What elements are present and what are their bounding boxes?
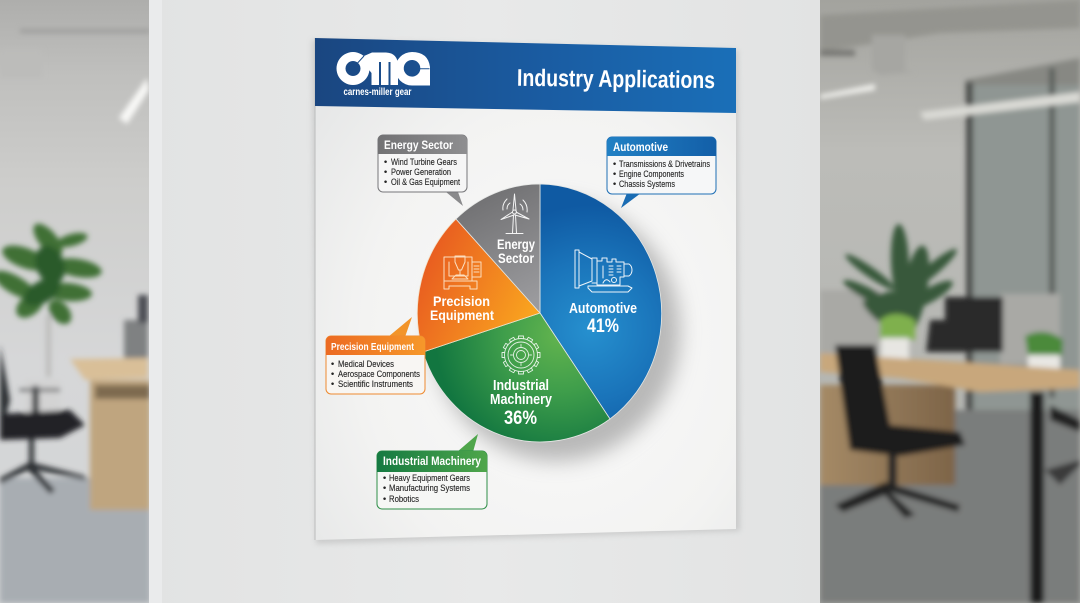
background: office left: [0, 0, 150, 603]
slice: industrial machinery: [423, 313, 610, 442]
label: precision equipment: Equipment: [430, 307, 494, 323]
header band: [315, 38, 736, 113]
pie chart: [417, 184, 662, 442]
callout: precision equipment: Scientific Instruments: [338, 379, 413, 389]
callout: industrial machinery: •: [383, 494, 386, 504]
callout: energy sector: Energy Sector: [384, 138, 453, 152]
callout: energy sector: Oil & Gas Equipment: [391, 177, 460, 187]
background: office right: [820, 0, 1080, 603]
callout: automotive: [607, 137, 716, 208]
callout: automotive: Chassis Systems: [619, 179, 675, 189]
logo: [337, 52, 430, 98]
callout: automotive: •: [613, 159, 616, 169]
callout: energy sector: Power Generation: [391, 167, 451, 177]
callout: precision equipment: •: [331, 369, 334, 379]
poster: [315, 38, 736, 540]
callout: precision equipment: •: [331, 359, 334, 369]
label: energy sector: Sector: [498, 251, 535, 266]
label: automotive: Automotive: [569, 300, 637, 317]
logo text: carnes-miller gear: [344, 87, 412, 98]
callout: automotive: •: [613, 179, 616, 189]
title: Industry Applications: [517, 65, 715, 94]
callout: energy sector: •: [384, 157, 387, 167]
callout: automotive: Transmissions & Drivetrains: [619, 159, 710, 169]
callout: industrial machinery: [377, 434, 487, 509]
callout: precision equipment: Precision Equipment: [331, 341, 414, 353]
icon: wind turbine: [501, 194, 529, 234]
slice: automotive: [540, 184, 662, 419]
slice: energy sector: [456, 184, 540, 313]
callout: precision equipment: •: [331, 379, 334, 389]
label: industrial machinery: [490, 377, 553, 429]
callout: precision equipment: [326, 317, 425, 394]
label: precision equipment: Precision: [433, 293, 490, 309]
pie shadow: [432, 201, 680, 461]
poster shadow: [312, 40, 740, 544]
callout: industrial machinery: •: [383, 473, 386, 483]
callout: energy sector: [378, 135, 467, 206]
label: industrial machinery: 36%: [504, 408, 537, 429]
callout: precision equipment: Aerospace Components: [338, 369, 420, 379]
callout: industrial machinery: Heavy Equipment Gears: [389, 473, 470, 483]
icon: transmission: [575, 250, 632, 292]
label: industrial machinery: Industrial: [493, 377, 549, 394]
label: automotive: [569, 300, 637, 337]
callout: automotive: •: [613, 169, 616, 179]
icon: gear: [502, 336, 540, 374]
wall panel: [149, 0, 820, 603]
label: energy sector: Energy: [497, 237, 535, 252]
callout: energy sector: •: [384, 167, 387, 177]
callout: industrial machinery: Manufacturing Systems: [389, 483, 470, 493]
label: precision equipment: [430, 293, 494, 323]
logo mark: [337, 52, 430, 86]
callout: energy sector: •: [384, 177, 387, 187]
label: automotive: 41%: [587, 316, 619, 337]
callout: industrial machinery: •: [383, 483, 386, 493]
label: industrial machinery: Machinery: [490, 391, 553, 408]
label: energy sector: [497, 237, 535, 266]
callout: automotive: Engine Components: [619, 169, 684, 179]
callout: precision equipment: Medical Devices: [338, 359, 394, 369]
callout: automotive: Automotive: [613, 140, 668, 154]
callout: industrial machinery: Industrial Machinery: [383, 454, 481, 468]
icon: precision machine: [444, 256, 481, 289]
callout: energy sector: Wind Turbine Gears: [391, 157, 457, 167]
slice: precision equipment: [417, 219, 540, 352]
callout: industrial machinery: Robotics: [389, 494, 419, 504]
